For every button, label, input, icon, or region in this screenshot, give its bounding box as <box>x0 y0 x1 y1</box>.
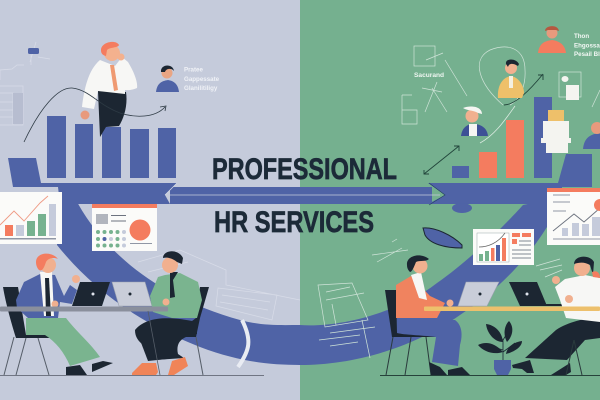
laptop silver right <box>458 282 499 306</box>
icon: document boxes <box>541 76 579 153</box>
avatar top right <box>538 26 566 53</box>
swoosh white ring <box>238 320 248 367</box>
laptop silver left <box>112 282 152 306</box>
blob near arrow <box>452 203 472 213</box>
left table <box>0 306 168 375</box>
right bar chart <box>452 97 552 178</box>
person orange jacket <box>396 255 470 375</box>
caption right: Ehgossa <box>574 42 600 50</box>
plant in pot <box>478 321 522 375</box>
caption left: Glanilitiligy <box>184 85 218 92</box>
title: HR SERVICES <box>214 206 374 239</box>
right platform <box>428 154 592 204</box>
person blue jacket <box>16 254 113 375</box>
left floor <box>0 375 264 376</box>
caption left: Pratee <box>184 66 203 74</box>
person with yellow jacket <box>498 60 524 98</box>
sketch lines right <box>318 46 600 358</box>
slide: top right <box>547 188 600 245</box>
right table <box>424 306 600 311</box>
growth arrow left <box>24 88 166 142</box>
panel: right background <box>300 0 600 400</box>
person green jacket <box>132 251 202 375</box>
left platform <box>8 158 177 204</box>
central double arrow <box>165 183 445 205</box>
sketch lines: left building <box>0 42 300 320</box>
caption left: Gappessate <box>184 76 220 83</box>
title: PROFESSIONAL <box>212 153 397 186</box>
man standing on chart <box>80 42 137 137</box>
slide: bar report <box>473 229 534 265</box>
caption right: Pesail Bl <box>574 51 600 58</box>
icon: small blue device <box>28 48 39 54</box>
slide: left line chart <box>0 192 62 244</box>
swoosh band <box>57 200 547 365</box>
icon: blue dish <box>423 228 462 248</box>
person white shirt <box>512 257 600 375</box>
growth arrows right <box>424 74 543 174</box>
laptop black right <box>509 282 566 306</box>
chair right person <box>385 290 436 375</box>
caption right <box>574 33 600 58</box>
person white cap <box>461 106 488 136</box>
right chair left side <box>176 287 209 375</box>
title <box>212 153 397 239</box>
left chair one <box>3 287 56 375</box>
caption sacurand: Sacurand <box>414 72 444 79</box>
panel: left background <box>0 0 300 400</box>
caption left <box>184 66 220 92</box>
laptop black left <box>72 282 110 306</box>
right floor <box>380 375 600 376</box>
left bar chart <box>47 116 176 178</box>
slide: dots and circle <box>92 204 157 251</box>
chair legs right person <box>566 340 582 375</box>
avatar left <box>156 65 179 92</box>
person far right <box>583 122 600 149</box>
caption right: Thon <box>574 33 589 40</box>
